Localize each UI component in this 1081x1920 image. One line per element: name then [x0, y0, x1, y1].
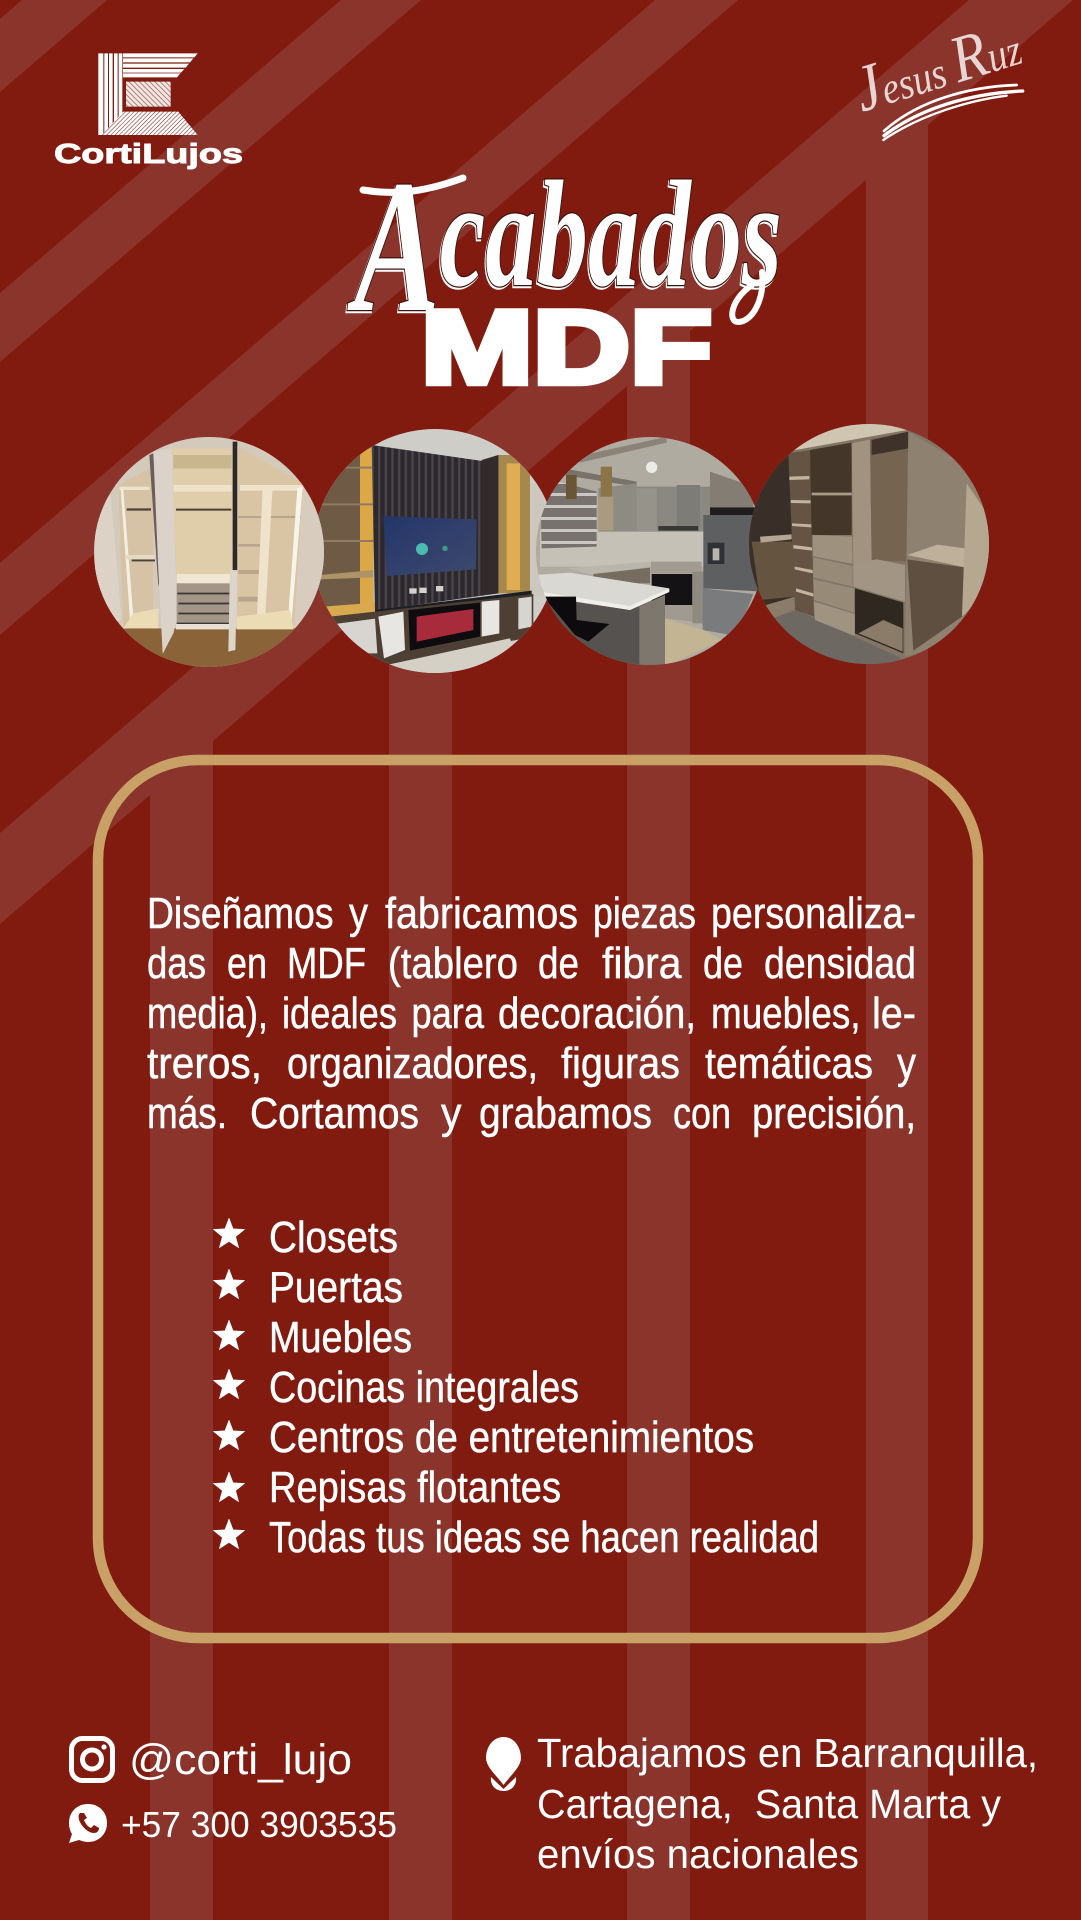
text block: description: Diseñamos [147, 889, 334, 938]
text block: description: y [349, 889, 368, 938]
script word Acabados [347, 142, 782, 352]
text block: description: ideales [282, 989, 397, 1038]
script word Acabados: cabados [440, 150, 782, 318]
text block: description: más. [147, 1089, 227, 1138]
icon: whatsapp [69, 1804, 107, 1843]
text block: description: para [412, 989, 484, 1038]
item: Closets [213, 1213, 398, 1262]
contact: whatsapp [69, 1804, 397, 1845]
photo: closet with lights [318, 429, 547, 673]
text block: description [147, 889, 916, 1138]
item: Centros de entretenimientos: Centros de entretenimientos [269, 1413, 754, 1462]
brand name: CortiLujos [54, 138, 243, 169]
text block: description: de [538, 939, 579, 988]
item: Puertas [213, 1263, 403, 1312]
location text: Cartagena, Santa Marta y [537, 1781, 1001, 1827]
photo: kitchen [536, 437, 758, 665]
logo: CortiLujos [54, 53, 243, 169]
text block: description: densidad [764, 939, 916, 988]
icon: instagram [72, 1738, 112, 1780]
photo: wood closet [743, 420, 993, 673]
text block: description: fibra [602, 939, 682, 988]
text block: description: con [673, 1089, 731, 1138]
list: services with stars [213, 1213, 819, 1562]
text block: description: en [227, 939, 267, 988]
text block: description: decoración, [498, 989, 696, 1038]
text block: description: personaliza- [711, 889, 916, 938]
item: Muebles: Muebles [269, 1313, 412, 1362]
text block: description: y [441, 1089, 462, 1138]
text block: description: precisión, [752, 1089, 916, 1138]
text block: description: temáticas [705, 1039, 873, 1088]
text block: description: treros, [147, 1039, 262, 1088]
text block: description: Cortamos [250, 1089, 419, 1138]
icon: map pin [486, 1737, 521, 1791]
item: Todas tus ideas: Todas tus ideas se hacen realidad [269, 1513, 819, 1562]
photo circles [90, 420, 993, 677]
block word MDF: MDF [421, 290, 712, 406]
handle: @corti_lujo [129, 1736, 352, 1784]
text block: description: das [147, 939, 206, 988]
text block: description: y [897, 1039, 916, 1088]
phone number: +57 300 3903535 [121, 1804, 397, 1845]
text block: description: organizadores, [287, 1039, 538, 1088]
item: Cocinas integrales: Cocinas integrales [269, 1363, 579, 1412]
text block: description: le- [872, 989, 916, 1038]
location text [537, 1730, 1038, 1877]
text block: description: figuras [561, 1039, 680, 1088]
photo: wardrobe [90, 433, 330, 670]
panel: gold rounded frame [98, 760, 978, 1638]
contact: location [486, 1730, 1038, 1877]
item: Closets: Closets [269, 1213, 398, 1262]
location text: envíos nacionales [537, 1831, 859, 1877]
script word Acabados: A [347, 142, 440, 352]
title: Acabados MDF [347, 142, 782, 406]
text block: description: muebles, [711, 989, 860, 1038]
text block: description: de [703, 939, 743, 988]
text block: description: MDF [287, 939, 366, 988]
text block: description: (tablero [388, 939, 518, 988]
icon: striped E mark [98, 53, 198, 135]
item: Puertas: Puertas [269, 1263, 403, 1312]
contact: instagram [72, 1736, 352, 1784]
item: Repisas flotantes: Repisas flotantes [269, 1463, 561, 1512]
text block: description: media), [147, 989, 268, 1038]
text block: description: fabricamos [385, 889, 578, 938]
text block: description: grabamos [479, 1089, 652, 1138]
text block: description: piezas [593, 889, 696, 938]
location text: Trabajamos en Barranquilla, [537, 1730, 1038, 1776]
item: Muebles [213, 1313, 412, 1362]
signature: Jesus Ruz: Jesus Ruz [845, 7, 1029, 126]
